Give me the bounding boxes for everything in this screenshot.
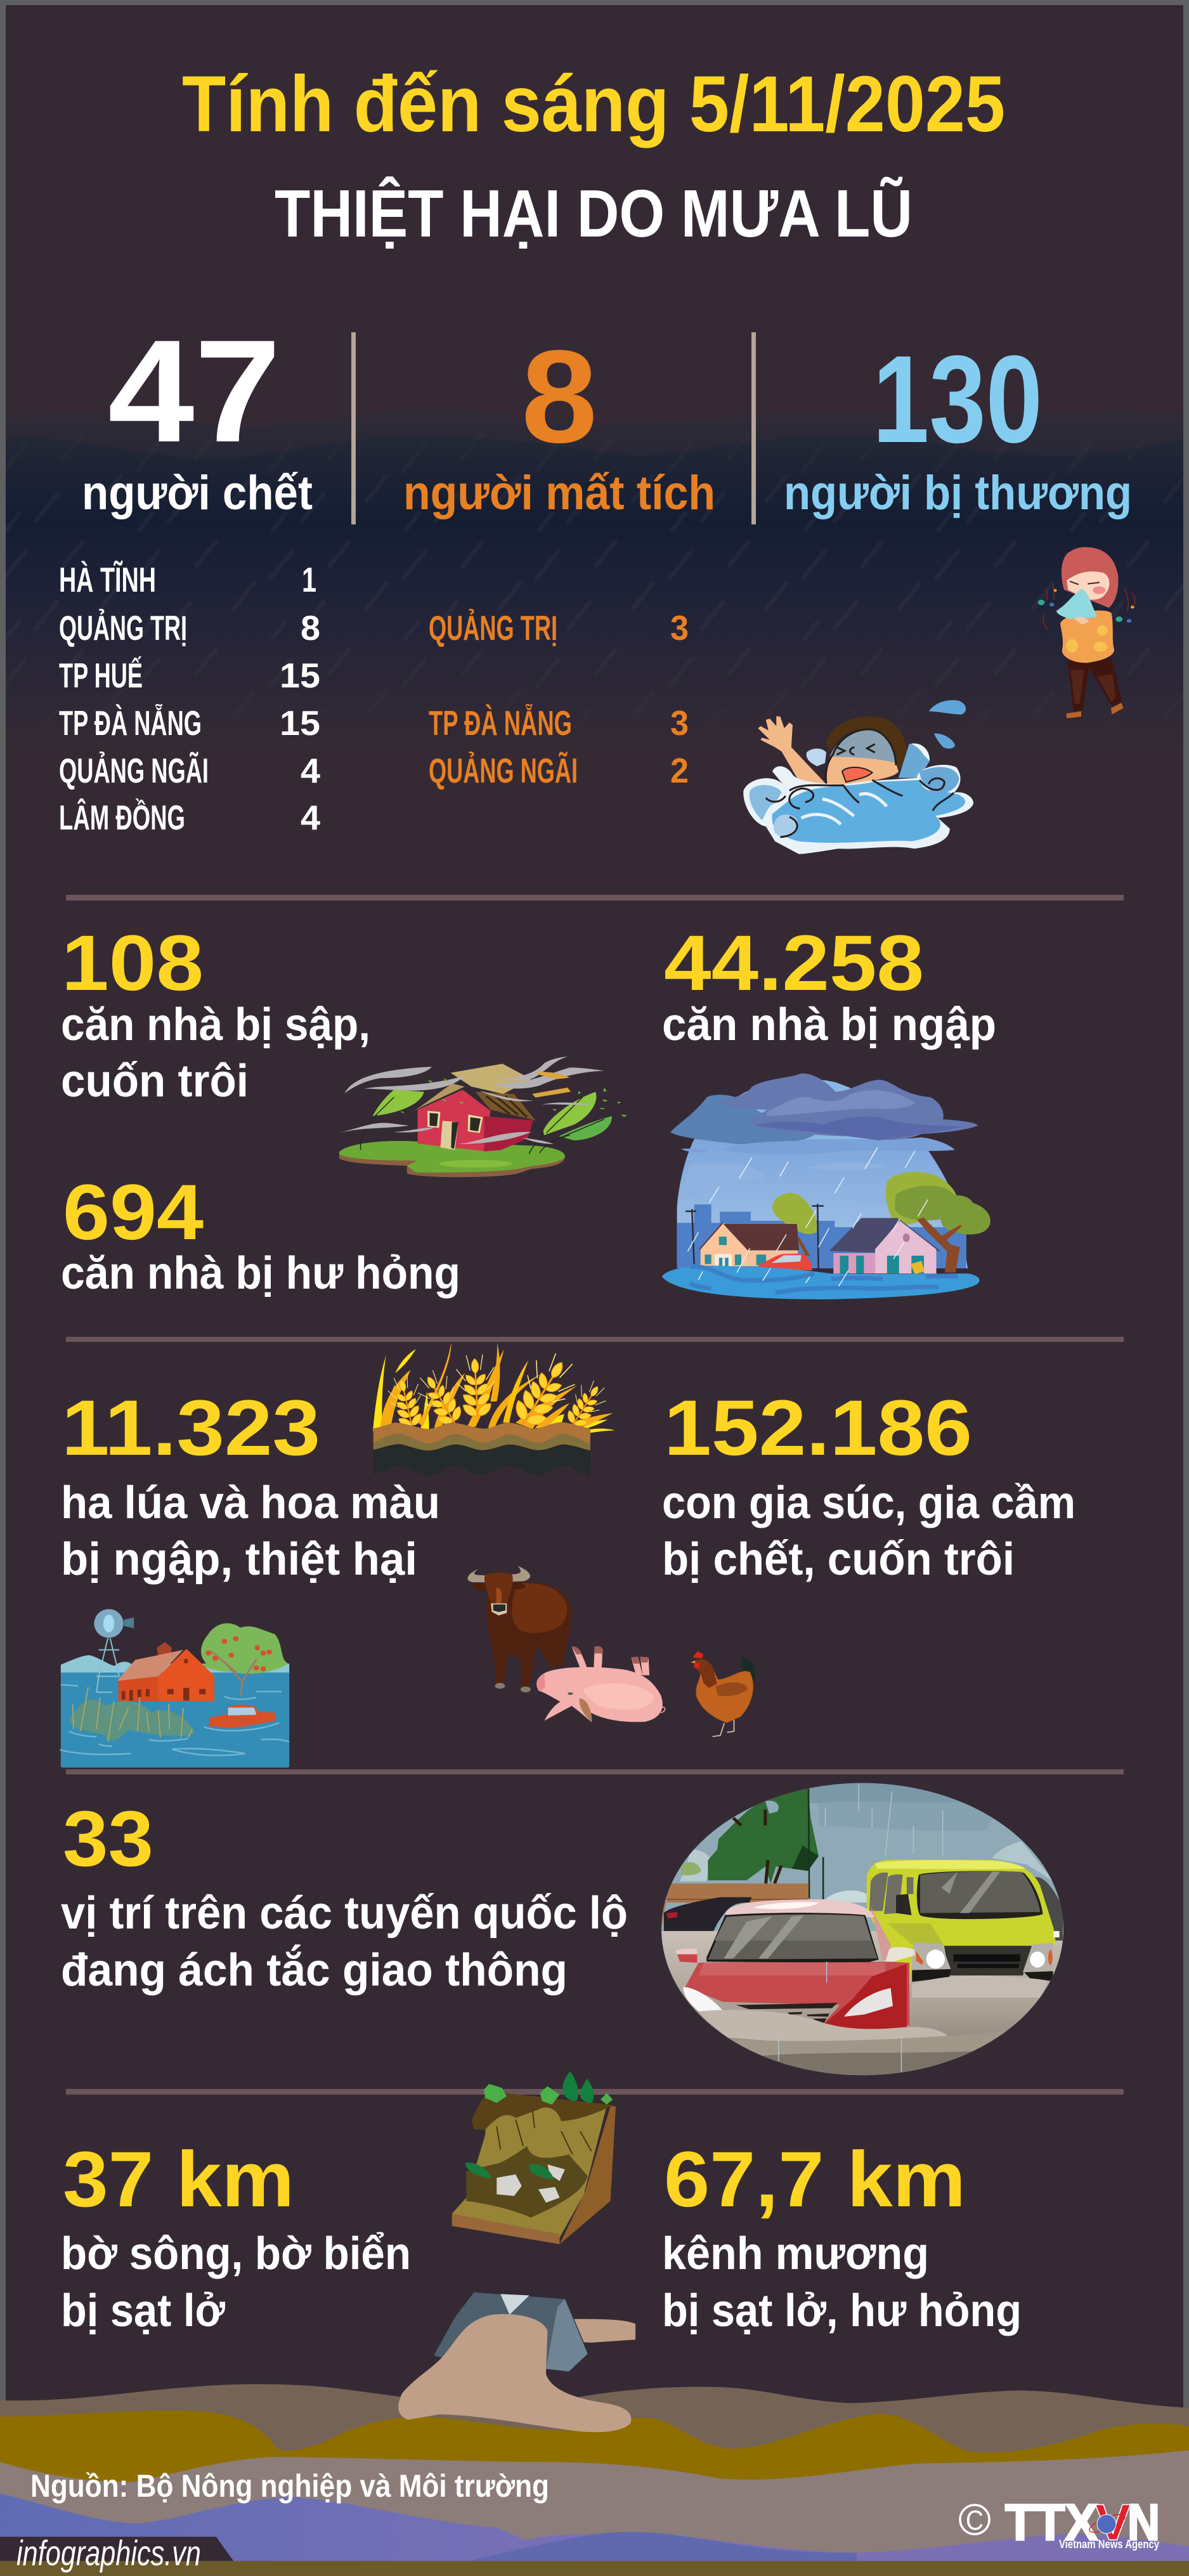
stat: livestock: con gia súc, gia cầm (662, 1478, 1075, 1528)
stat: missing: người mất tích (403, 466, 715, 520)
stat: damaged houses: 694 (63, 1169, 204, 1256)
stat: canals: 67,7 km (664, 2136, 966, 2223)
stat: crops (61, 1384, 440, 1585)
table: missing by province: TP ĐÀ NẴNG (429, 703, 572, 743)
stat: traffic blocked: 33 (63, 1795, 153, 1883)
stat: injured: người bị thương (784, 466, 1132, 520)
title: Tính đến sáng 5/11/2025 (182, 60, 1005, 148)
table: deaths by province: 15 (280, 656, 320, 695)
stat: livestock: 152.186 (664, 1384, 972, 1472)
table: deaths by province: LÂM ĐỒNG (59, 798, 185, 837)
logo: TTXVN: Vietnam News Agency (1059, 2538, 1159, 2551)
table: deaths by province (59, 560, 320, 837)
icon: broken road collapse (398, 2293, 635, 2432)
stat: damaged houses (61, 1169, 460, 1299)
background: rainy sky waves (6, 429, 1183, 694)
image: flooded road with cars in oval (661, 1782, 1064, 2077)
icon: flooded neighbourhood under rain cloud (662, 1074, 991, 1299)
divider 2 (66, 1337, 1124, 1342)
stat: crops: 11.323 (62, 1384, 320, 1472)
stat: canals: kênh mương (662, 2228, 929, 2279)
stat: deaths: người chết (82, 466, 313, 520)
background: bottom layered ground waves (0, 2384, 1189, 2576)
stat: collapsed houses: căn nhà bị sập, (61, 999, 370, 1050)
stat: injured (784, 330, 1132, 520)
icon: landslide block (452, 2071, 616, 2244)
table: deaths by province: HÀ TĨNH (59, 560, 156, 599)
icon: dead pig (536, 1646, 665, 1722)
logo: TTXVN: N (1127, 2494, 1160, 2551)
icon: flooded farm (60, 1609, 289, 1767)
logo: TTXVN: TTX (1005, 2494, 1098, 2551)
stat: flooded houses (662, 920, 996, 1050)
icon: bull (467, 1566, 571, 1693)
icon: person drowning in flood water (743, 700, 973, 854)
stat: injured: 130 (873, 330, 1043, 469)
table: deaths by province: 15 (280, 703, 320, 743)
table: missing by province: QUẢNG TRỊ (429, 608, 557, 647)
subtitle: THIỆT HẠI DO MƯA LŨ (275, 176, 913, 251)
stat: livestock (662, 1384, 1075, 1585)
stat: collapsed houses (61, 920, 370, 1107)
divider 1 (66, 895, 1124, 901)
table: deaths by province: 1 (302, 560, 316, 599)
stat: deaths (82, 309, 313, 520)
stat: deaths: 47 (108, 309, 281, 472)
table: deaths by province: 4 (301, 751, 320, 790)
divider 3 (66, 1769, 1124, 1774)
table: deaths by province: TP ĐÀ NẴNG (59, 703, 202, 743)
stat: river and sea banks: bờ sông, bờ biển (61, 2228, 411, 2279)
table: missing by province: QUẢNG NGÃI (429, 751, 578, 790)
table: deaths by province: 8 (301, 608, 320, 647)
stat: collapsed houses: 108 (62, 920, 204, 1007)
stat: flooded houses: 44.258 (664, 920, 924, 1007)
stat: damaged houses: căn nhà bị hư hỏng (61, 1248, 460, 1299)
table: missing by province: 2 (670, 751, 689, 790)
table: deaths by province: 4 (301, 798, 320, 837)
table: missing by province (429, 608, 689, 790)
stat: crops: ha lúa và hoa màu (61, 1478, 440, 1528)
stat: collapsed houses: cuốn trôi (61, 1056, 249, 1107)
stat: river and sea banks: bị sạt lở (61, 2286, 226, 2336)
table: missing by province: 3 (670, 608, 689, 647)
stat: missing (403, 323, 715, 520)
stat: livestock: bị chết, cuốn trôi (662, 1534, 1015, 1585)
logo: TTXVN (960, 2494, 1160, 2551)
icon: house in storm (336, 1057, 627, 1177)
stat: traffic blocked: đang ách tắc giao thông (61, 1944, 568, 1996)
stat: river and sea banks: 37 km (63, 2136, 294, 2223)
stat: traffic blocked: vị trí trên các tuyến quốc lộ (61, 1888, 628, 1939)
icon: sick girl with tissue (1038, 547, 1135, 719)
logo: TTXVN: V (1095, 2494, 1131, 2551)
logo: TTXVN: C (966, 2505, 984, 2536)
icon: wheat field (373, 1343, 614, 1476)
icon: chicken (691, 1651, 755, 1736)
stat: canals: bị sạt lở, hư hỏng (662, 2286, 1022, 2336)
table: deaths by province: QUẢNG TRỊ (59, 608, 187, 647)
stat: crops: bị ngập, thiệt hại (61, 1534, 417, 1585)
stat: traffic blocked (61, 1795, 628, 1996)
stat: missing: 8 (521, 323, 597, 471)
stat: canals (662, 2136, 1022, 2336)
stat: flooded houses: căn nhà bị ngập (662, 999, 996, 1050)
table: deaths by province: TP HUẾ (59, 656, 143, 695)
divider 4 (66, 2089, 1124, 2095)
source: Nguồn: Bộ Nông nghiệp và Môi trường (30, 2468, 549, 2504)
website: infographics.vn (16, 2533, 201, 2573)
table: missing by province: 3 (670, 703, 689, 743)
table: deaths by province: QUẢNG NGÃI (59, 751, 209, 790)
stat: river and sea banks (61, 2136, 411, 2336)
